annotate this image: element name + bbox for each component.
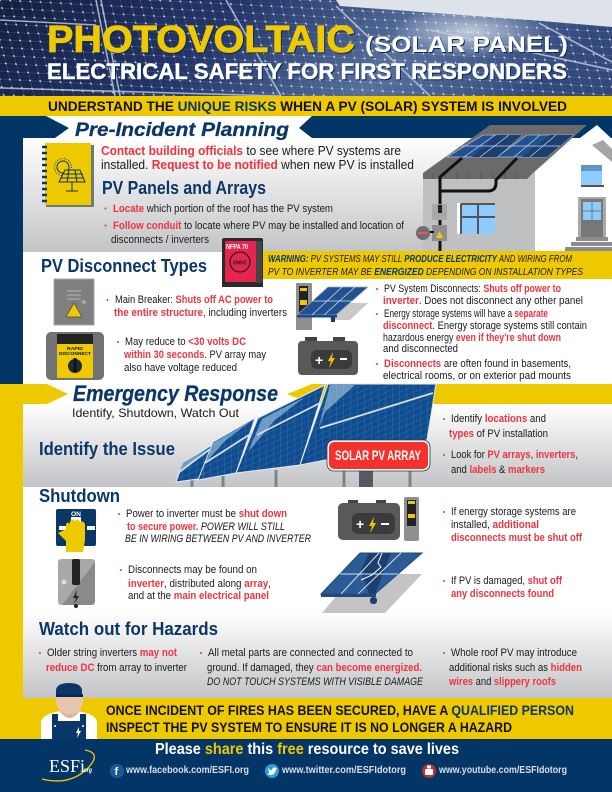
text: damaged PV: any disconnects found [451, 588, 554, 600]
link: facebook [110, 764, 249, 778]
text: disconnect locations: inverter, distributed along array, [128, 578, 271, 590]
text: identify locations: Look for PV arrays, inverters, [451, 449, 578, 461]
icon: battery with disconnect [338, 497, 419, 541]
link: youtube: www.youtube.com/ESFIdotorg [438, 765, 567, 776]
subheading: identify, shutdown, watch out: Identify, Shutdown, Watch Out [72, 406, 240, 420]
text: PV system disconnects: and disconnected [383, 343, 458, 355]
callout: qualified person: ONCE INCIDENT OF FIRES HAS BEEN SECURED, HAVE A QUALIFIED PERSON [106, 702, 574, 718]
icon: NFPA 70 code book: NFPA 70 [226, 244, 248, 251]
text: shut down power [118, 508, 311, 545]
text: shut down power: to secure power. POWER WILL STILL [127, 521, 285, 533]
icon: hand on switch [56, 509, 96, 552]
text: main breaker: the entire structure, including inverters [114, 307, 287, 319]
sign: solar PV array: SOLAR PV ARRAY [335, 447, 421, 463]
text: identify locations: Identify locations and [451, 413, 546, 425]
title: PHOTOVOLTAIC [47, 19, 355, 61]
text: main breaker [106, 294, 287, 319]
subtitle banner: UNDERSTAND THE UNIQUE RISKS WHEN A PV (SOLAR) SYSTEM IS INVOLVED [48, 98, 567, 114]
text: main breaker: Main Breaker: Shuts off AC power to [115, 294, 273, 306]
call to action: Please share this free resource to save lives [155, 741, 459, 758]
icon: PV panel with disconnect [296, 283, 368, 330]
heading: Watch out for Hazards: Watch out for Hazards [39, 619, 218, 639]
logo: ESFi.org: .org [82, 768, 92, 774]
text: disconnect locations: and at the main electrical panel [128, 590, 269, 602]
title: ELECTRICAL SAFETY FOR FIRST RESPONDERS [47, 59, 567, 84]
text: rapid shutdown [117, 336, 266, 374]
link: facebook: f [114, 766, 118, 778]
panel: emergency response [0, 381, 612, 739]
text: metal parts: All metal parts are connected and connected to [208, 647, 413, 659]
text: older string inverters [39, 647, 187, 674]
text: whole roof PV: wires and slippery roofs [448, 676, 556, 688]
warning banner [262, 251, 612, 279]
text: whole roof PV [443, 647, 582, 688]
icon: inverter [58, 559, 95, 608]
link: twitter: www.twitter.com/ESFIdotorg [281, 765, 406, 776]
link: twitter [265, 764, 406, 778]
text: PV system disconnects: inverter. Does not disconnect any other panel [383, 295, 583, 307]
text: older string inverters: Older string inverters may not [47, 647, 177, 659]
illustration: house with PV panels [416, 125, 612, 252]
icon: battery [298, 337, 358, 375]
text: energy storage disconnects: If energy storage systems are [451, 506, 576, 518]
warning banner: WARNING: PV SYSTEMS MAY STILL PRODUCE ELECTRICITY AND WIRING FROM [268, 254, 573, 265]
heading: PV Disconnect Types: PV Disconnect Types [41, 256, 207, 276]
illustration: solar PV array [176, 384, 436, 487]
text: whole roof PV: additional risks such as hidden [449, 662, 582, 674]
text: damaged PV [443, 575, 562, 600]
warning banner: PV TO INVERTER MAY BE ENERGIZED DEPENDING ON INSTALLATION TYPES [268, 267, 583, 278]
icon: main breaker box [54, 279, 94, 325]
link: facebook: www.facebook.com/ESFI.org [125, 765, 249, 776]
subtitle banner [0, 96, 612, 116]
icon: notebook [42, 143, 94, 207]
text: PV system disconnects: PV System Disconnects: Shuts off power to [384, 283, 561, 295]
callout: qualified person [106, 702, 574, 735]
text: identify locations [443, 413, 578, 476]
title: (SOLAR PANEL) [365, 32, 568, 57]
text: rapid shutdown: also have voltage reduced [124, 362, 237, 374]
list: PV panels and arrays: disconnects / inverters [111, 234, 209, 246]
heading: PV Panels and Arrays: PV Panels and Arrays [102, 178, 266, 198]
text: whole roof PV: Whole roof PV may introduce [451, 647, 577, 659]
icon: battery with disconnect: + [356, 516, 364, 532]
text: identify locations: and labels & markers [451, 464, 545, 476]
heading ribbon: Pre-Incident Planning: Pre-Incident Planning [75, 120, 289, 141]
text: PV system disconnects: electrical rooms, or on exterior pad mounts [383, 370, 571, 382]
icon: NFPA 70 code book [222, 238, 263, 287]
panel: pre-incident planning [0, 116, 612, 384]
text: older string inverters: reduce DC from array to inverter [46, 662, 187, 674]
text: PV system disconnects: hazardous energy even if they're shut down [383, 332, 561, 344]
text: disconnect locations [120, 564, 271, 602]
heading ribbon: Pre-Incident Planning [46, 116, 312, 141]
icon: rapid disconnect switch: DISCONNECT [59, 351, 91, 357]
icon: battery: + [315, 352, 323, 368]
icon: rapid disconnect switch: RAPID [67, 346, 84, 352]
text: disconnect locations: Disconnects may be found on [128, 564, 257, 576]
text: damaged PV: If PV is damaged, shut off [451, 575, 562, 587]
text: PV system disconnects: Disconnects are often found in basements, [384, 358, 571, 370]
text: metal parts: ground. If damaged, they can become energized. [207, 662, 422, 674]
text: metal parts: DO NOT TOUCH SYSTEMS WITH VISIBLE DAMAGE [207, 676, 424, 688]
footer [0, 739, 612, 792]
logo: ESFi.org: ESFi [49, 756, 85, 776]
text: energy storage disconnects [443, 506, 582, 544]
text: PV system disconnects: disconnect. Energy storage systems still contain [383, 320, 587, 332]
title [47, 19, 568, 84]
text: rapid shutdown: May reduce to <30 volts DC [125, 336, 246, 348]
icon: NFPA 70 code book: nec [233, 260, 247, 266]
list: PV panels and arrays [104, 203, 405, 246]
text: contact building officials: installed. Request to be notified when new PV is installed [101, 158, 414, 172]
text: rapid shutdown: within 30 seconds. PV array may [123, 349, 266, 361]
heading: Identify the Issue: Identify the Issue [39, 439, 175, 459]
text: shut down power: Power to inverter must be shut down [126, 508, 287, 520]
list: PV panels and arrays: Follow conduit to locate where PV may be installed and location of [113, 220, 405, 232]
text: energy storage disconnects: installed, additional [451, 519, 539, 531]
icon: hand on switch: ON [71, 512, 81, 518]
link: youtube [422, 764, 567, 778]
illustration: electrician [41, 683, 97, 739]
text: identify locations: types of PV installation [449, 428, 548, 440]
text: metal parts [200, 647, 424, 688]
text: contact building officials: Contact building officials to see where PV systems are [101, 144, 401, 158]
heading: Shutdown: Shutdown [39, 486, 120, 506]
text: energy storage disconnects: disconnects must be shut off [451, 532, 582, 544]
logo: ESFi.org [42, 750, 94, 781]
sign: solar PV array [327, 440, 430, 471]
text: PV system disconnects: Energy storage systems will have a separate [384, 308, 548, 320]
text: shut down power: BE IN WIRING BETWEEN PV AND INVERTER [125, 533, 311, 545]
text: PV system disconnects [376, 283, 587, 382]
text: contact building officials [101, 144, 414, 172]
callout: qualified person: INSPECT THE PV SYSTEM TO ENSURE IT IS NO LONGER A HAZARD [106, 719, 512, 735]
icon: damaged PV panel [321, 553, 422, 613]
heading ribbon: Emergency Response: Emergency Response [73, 381, 278, 406]
header photo: solar panels [0, 0, 612, 96]
list: PV panels and arrays: Locate which portion of the roof has the PV system [113, 203, 333, 215]
icon: rapid disconnect switch [46, 332, 104, 380]
